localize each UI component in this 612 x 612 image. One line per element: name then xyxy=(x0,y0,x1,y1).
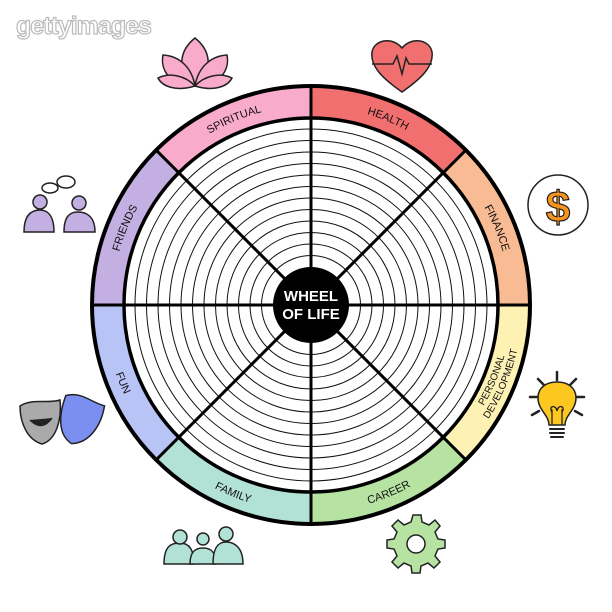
label: health: HEALTH xyxy=(368,107,410,130)
label: career: CAREER xyxy=(368,480,410,503)
icon: dollar: $ xyxy=(546,183,570,232)
icon: theatre masks xyxy=(20,392,106,449)
label: fun: FUN xyxy=(116,372,131,394)
band: personal development xyxy=(311,305,530,460)
label: spiritual: SPIRITUAL xyxy=(207,106,262,133)
label: friends: FRIENDS xyxy=(112,204,137,251)
band: family xyxy=(156,305,311,524)
band: career xyxy=(311,305,466,524)
label: personal: PERSONAL xyxy=(478,356,504,406)
wheel xyxy=(90,84,532,526)
icon: lotus xyxy=(158,38,232,88)
icon: friends chat xyxy=(24,176,95,232)
watermark logo: gettyimages xyxy=(16,12,151,40)
center hub xyxy=(273,267,349,343)
icon: light bulb xyxy=(530,372,584,437)
band: spiritual xyxy=(156,86,311,305)
center hub: OF LIFE xyxy=(282,306,340,323)
label: development: DEVELOPMENT xyxy=(483,348,517,418)
icon: dollar xyxy=(528,175,588,235)
icon: gear xyxy=(387,515,445,573)
label: family: FAMILY xyxy=(215,482,252,502)
icon: heart xyxy=(372,41,432,92)
icon: family xyxy=(164,527,243,564)
band: friends xyxy=(92,150,311,305)
band: fun xyxy=(92,305,311,460)
center hub: WHEEL xyxy=(284,288,338,305)
band: health xyxy=(311,86,466,305)
label: finance: FINANCE xyxy=(484,204,510,252)
band: finance xyxy=(311,150,530,305)
